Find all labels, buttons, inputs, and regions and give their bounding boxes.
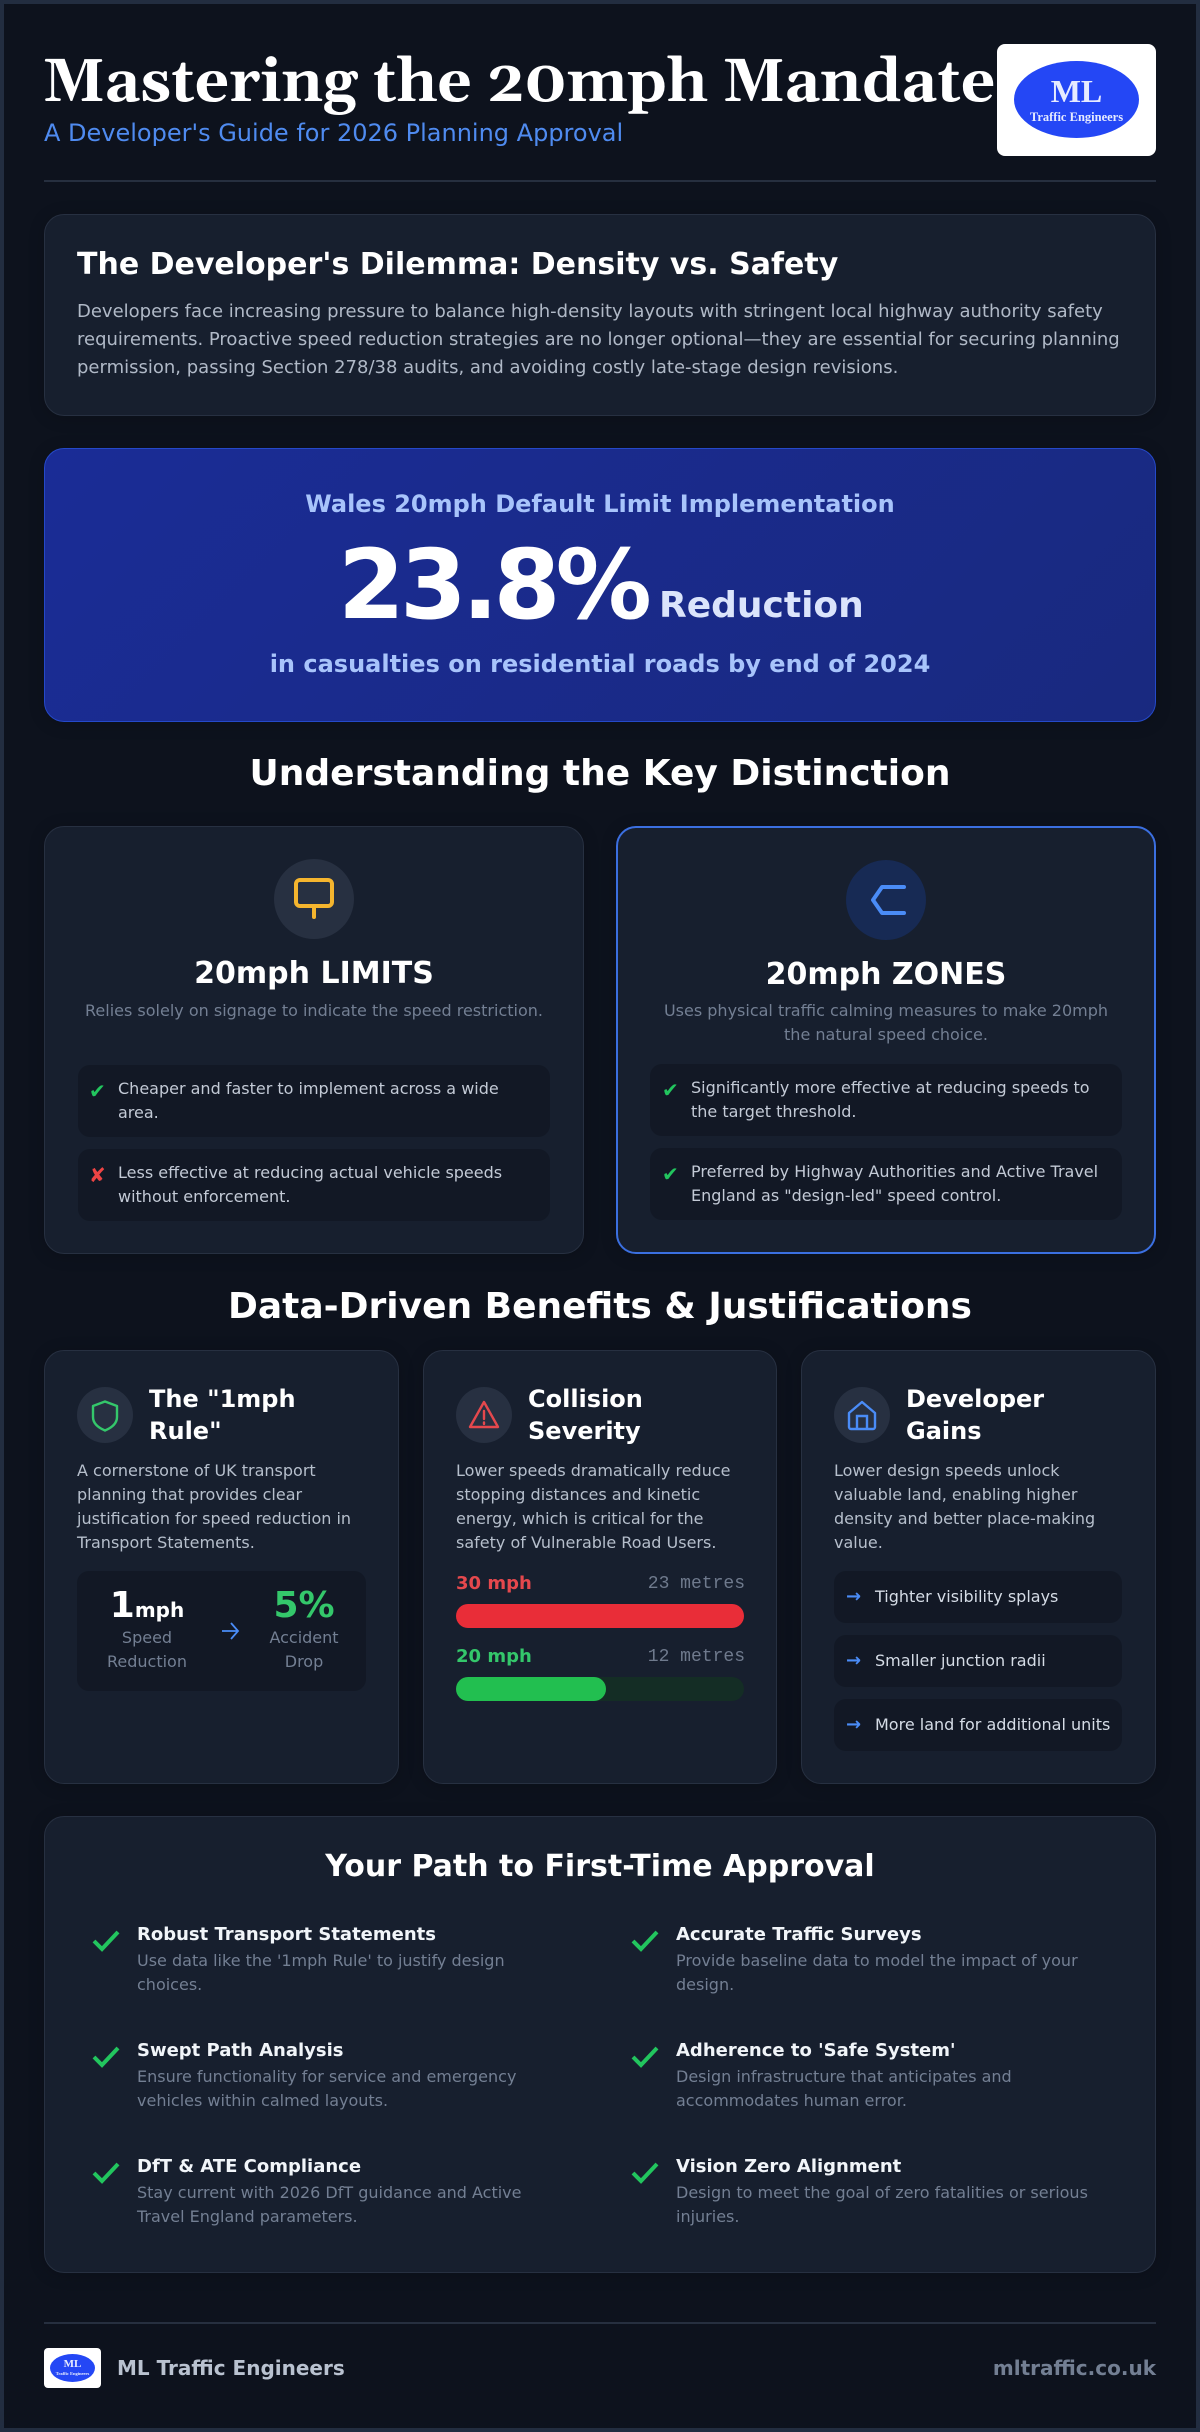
- limits description: Relies solely on signage to indicate the speed restriction.: [85, 1001, 543, 1020]
- collision title: Severity: [528, 1417, 641, 1445]
- title: Mastering the 20mph Mandate: [43, 45, 995, 122]
- 30 mph label: 30 mph: [456, 1573, 532, 1594]
- limits con: [78, 1149, 550, 1221]
- zones title: 20mph ZONES: [766, 957, 1006, 992]
- item: vision zero: [632, 2156, 1088, 2226]
- panel: 20mph zones: [616, 826, 1156, 1254]
- item: dft and ate compliance: Stay current with 2026 DfT guidance and Active: [137, 2183, 522, 2202]
- panel: hero statistic: [44, 448, 1156, 722]
- collision title: Collision: [528, 1385, 643, 1413]
- item: accurate traffic surveys: Accurate Traffic Surveys: [676, 1924, 922, 1945]
- stat: accident drop label: [269, 1628, 339, 1671]
- gains text: Lower design speeds unlock: [834, 1461, 1060, 1480]
- gain: junction radii: [834, 1635, 1122, 1687]
- zones description: the natural speed choice.: [784, 1025, 988, 1044]
- rule text: planning that provides clear: [77, 1485, 302, 1504]
- zones pro two: [650, 1148, 1122, 1220]
- subtitle: A Developer's Guide for 2026 Planning Approval: [44, 119, 623, 147]
- stat: 1mph: 1mph: [110, 1585, 184, 1626]
- stat: 5%: 5%: [273, 1585, 335, 1626]
- gains text: [834, 1461, 1095, 1552]
- rule text: justification for speed reduction in: [77, 1509, 351, 1528]
- dilemma text: requirements. Proactive speed reduction strategies are no longer optional—they are essential for securing planning: [77, 329, 1120, 350]
- collision text: Lower speeds dramatically reduce: [456, 1461, 730, 1480]
- zones description: Uses physical traffic calming measures to make 20mph: [664, 1001, 1108, 1020]
- icon: traffic calming chicane: [846, 860, 926, 940]
- hero label: Wales 20mph Default Limit Implementation: [305, 490, 895, 518]
- stat: speed reduction label: [107, 1628, 187, 1671]
- 30 mph bar: [456, 1604, 744, 1628]
- 12 metres label: 12 metres: [648, 1647, 745, 1667]
- gain: additional units: →: [846, 1714, 861, 1735]
- gains title: Developer: [906, 1385, 1044, 1413]
- arrow: [222, 1622, 240, 1640]
- heading: benefits: Data-Driven Benefits & Justifications: [228, 1286, 972, 1327]
- limits pro: ✔: [89, 1079, 106, 1103]
- zones pro one: [650, 1064, 1122, 1136]
- panel: 20mph limits: [44, 826, 584, 1254]
- item: swept path analysis: Swept Path Analysis: [137, 2040, 344, 2061]
- item: accurate traffic surveys: [632, 1924, 1078, 1994]
- item: safe system: [632, 2040, 1012, 2110]
- gain: additional units: More land for additional units: [875, 1715, 1110, 1734]
- logo: Traffic Engineers: [1030, 110, 1123, 124]
- zones pro one: Significantly more effective at reducing speeds to: [691, 1078, 1090, 1097]
- zones description: [664, 1001, 1108, 1044]
- heading: key distinction: Understanding the Key Distinction: [250, 753, 950, 794]
- rule text: [76, 1461, 351, 1552]
- stat: accident drop label: Accident: [269, 1628, 339, 1647]
- limits title: 20mph LIMITS: [194, 956, 434, 991]
- hero caption: in casualties on residential roads by end of 2024: [270, 650, 930, 678]
- item: vision zero: injuries.: [676, 2207, 739, 2226]
- 20 mph bar: [456, 1677, 744, 1701]
- gains text: valuable land, enabling higher: [834, 1485, 1077, 1504]
- collision title: [528, 1385, 643, 1445]
- icon: speed sign: [274, 859, 354, 939]
- item: accurate traffic surveys: design.: [676, 1975, 734, 1994]
- rule title: [149, 1385, 296, 1445]
- footer company name: ML Traffic Engineers: [117, 2356, 345, 2380]
- footer logo: ML: [64, 2358, 81, 2370]
- item: robust transport statements: Use data like the '1mph Rule' to justify design: [137, 1951, 505, 1970]
- limits con: ✘: [89, 1163, 106, 1187]
- rule text: Transport Statements.: [77, 1533, 255, 1552]
- item: safe system: Design infrastructure that anticipates and: [676, 2067, 1012, 2086]
- icon: shield: [77, 1387, 133, 1443]
- stat: speed reduction label: Speed: [122, 1628, 172, 1647]
- 20 mph label: 20 mph: [456, 1646, 532, 1667]
- logo: [997, 44, 1156, 156]
- gains text: value.: [834, 1533, 883, 1552]
- hero number: 23.8%: [338, 529, 647, 641]
- item: safe system: accommodates human error.: [676, 2091, 907, 2110]
- icon: house: [834, 1387, 890, 1443]
- gain: visibility splays: →: [846, 1586, 861, 1607]
- zones pro one: ✔: [662, 1078, 679, 1102]
- zones pro one: the target threshold.: [691, 1102, 857, 1121]
- limits pro: Cheaper and faster to implement across a wide: [118, 1079, 499, 1098]
- item: swept path analysis: Ensure functionality for service and emergency: [137, 2067, 516, 2086]
- limits pro: [78, 1065, 550, 1137]
- item: dft and ate compliance: [92, 2156, 522, 2226]
- gain: junction radii: →: [846, 1650, 861, 1671]
- collision text: stopping distances and kinetic: [456, 1485, 700, 1504]
- collision text: safety of Vulnerable Road Users.: [456, 1533, 716, 1552]
- item: robust transport statements: choices.: [137, 1975, 202, 1994]
- limits con: without enforcement.: [118, 1187, 290, 1206]
- zones pro two: Preferred by Highway Authorities and Active Travel: [691, 1162, 1098, 1181]
- panel: developer's dilemma: [44, 214, 1156, 416]
- item: vision zero: Vision Zero Alignment: [676, 2156, 901, 2177]
- footer website: mltraffic.co.uk: [993, 2356, 1156, 2380]
- gains title: [906, 1385, 1044, 1445]
- gains title: Gains: [906, 1417, 982, 1445]
- rule text: A cornerstone of UK transport: [77, 1461, 316, 1480]
- gains text: density and better place-making: [834, 1509, 1095, 1528]
- 23 metres label: 23 metres: [648, 1574, 745, 1594]
- item: swept path analysis: [92, 2040, 516, 2110]
- rule statistic box: [77, 1571, 366, 1691]
- panel: path to approval: [44, 1816, 1156, 2273]
- hero unit: Reduction: [659, 585, 864, 626]
- item: dft and ate compliance: DfT & ATE Compliance: [137, 2156, 361, 2177]
- bar chart: stopping distances: [456, 1573, 745, 1701]
- zones pro two: ✔: [662, 1162, 679, 1186]
- stat: speed reduction label: Reduction: [107, 1652, 187, 1671]
- icon: warning triangle: [456, 1387, 512, 1443]
- item: robust transport statements: [92, 1924, 505, 1994]
- footer logo: Traffic Engineers: [56, 2371, 89, 2376]
- limits pro: area.: [118, 1103, 159, 1122]
- limits con: Less effective at reducing actual vehicle speeds: [118, 1163, 502, 1182]
- panel: developer gains: [801, 1350, 1156, 1784]
- item: robust transport statements: Robust Transport Statements: [137, 1924, 436, 1945]
- panel: collision severity: [423, 1350, 777, 1784]
- collision text: [456, 1461, 730, 1552]
- logo: ML: [1051, 73, 1102, 109]
- collision text: energy, which is critical for the: [456, 1509, 704, 1528]
- approval heading: Your Path to First-Time Approval: [325, 1849, 875, 1884]
- footer logo: [44, 2348, 101, 2388]
- item: swept path analysis: vehicles within calmed layouts.: [137, 2091, 388, 2110]
- gain: visibility splays: [834, 1571, 1122, 1623]
- zones pro two: England as "design-led" speed control.: [691, 1186, 1001, 1205]
- item: vision zero: Design to meet the goal of zero fatalities or serious: [676, 2183, 1088, 2202]
- stat: accident drop label: Drop: [285, 1652, 323, 1671]
- item: accurate traffic surveys: Provide baseline data to model the impact of your: [676, 1951, 1078, 1970]
- rule title: Rule": [149, 1417, 222, 1445]
- panel: 1mph rule: [44, 1350, 399, 1784]
- dilemma text: [77, 301, 1120, 378]
- dilemma heading: The Developer's Dilemma: Density vs. Safety: [77, 247, 838, 282]
- gain: junction radii: Smaller junction radii: [875, 1651, 1046, 1670]
- dilemma text: Developers face increasing pressure to balance high-density layouts with stringent local highway authority safety: [77, 301, 1103, 322]
- gain: visibility splays: Tighter visibility splays: [875, 1587, 1058, 1606]
- item: dft and ate compliance: Travel England parameters.: [137, 2207, 358, 2226]
- gain: additional units: [834, 1699, 1122, 1751]
- item: safe system: Adherence to 'Safe System': [676, 2040, 956, 2061]
- dilemma text: permission, passing Section 278/38 audits, and avoiding costly late-stage design revisions.: [77, 357, 898, 378]
- rule title: The "1mph: [149, 1385, 296, 1413]
